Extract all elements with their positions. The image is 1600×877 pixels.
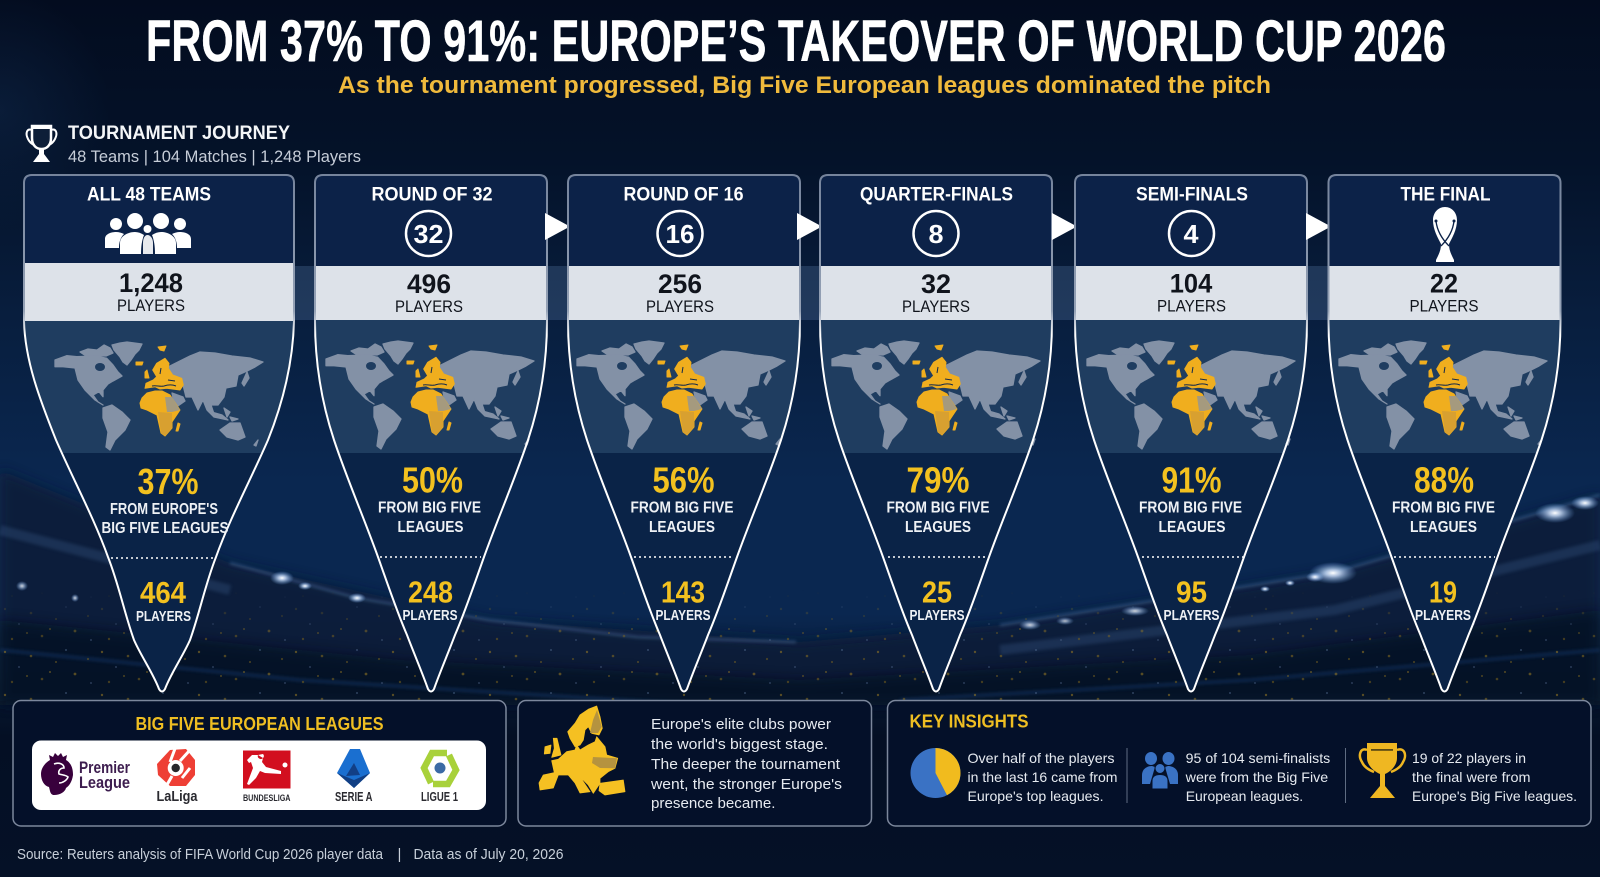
icon: europe map xyxy=(539,706,625,795)
stage heading: ROUND OF 32 xyxy=(372,184,492,206)
stage heading: SEMI-FINALS xyxy=(1136,184,1248,206)
big five players: 19 xyxy=(1429,574,1457,610)
panel: the final: PLAYERS xyxy=(1410,298,1478,316)
source footer: Data as of July 20, 2026 xyxy=(414,846,564,863)
big five share: 91% xyxy=(1162,460,1222,500)
stage heading: THE FINAL xyxy=(1400,184,1491,206)
icon: world cup trophy xyxy=(1433,207,1457,262)
stage heading: ALL 48 TEAMS xyxy=(87,184,211,206)
big five players: 248 xyxy=(408,574,453,610)
panel: semi-finals: PLAYERS xyxy=(1164,608,1220,624)
panel: all 48 teams: PLAYERS xyxy=(136,609,191,625)
insight: pie chart: Europe's top leagues. xyxy=(968,788,1104,804)
panel: round of 32 xyxy=(311,170,551,698)
insight: final trophy: Europe's Big Five leagues. xyxy=(1412,788,1577,804)
panel: quarter-finals: PLAYERS xyxy=(902,298,970,316)
big five share: 56% xyxy=(652,460,714,500)
insight: semi-finalists: 95 of 104 semi-finalists xyxy=(1186,750,1330,766)
logo: serie a: SERIE A xyxy=(335,790,372,804)
arrow xyxy=(797,213,822,240)
panel: quarter-finals: LEAGUES xyxy=(905,519,971,536)
callout text: Europe's elite clubs power xyxy=(651,716,831,733)
panel: round of 16: PLAYERS xyxy=(656,608,711,624)
big five players: 143 xyxy=(661,574,705,610)
player count: 22 xyxy=(1430,269,1458,299)
insight: pie chart: in the last 16 came from xyxy=(968,769,1118,785)
insight: semi-finalists xyxy=(1142,750,1330,804)
panel: quarter-finals: PLAYERS xyxy=(910,608,965,624)
panel: semi-finals xyxy=(1071,170,1311,698)
arrow xyxy=(545,213,570,240)
icon: trophy xyxy=(27,126,56,162)
panel: big five european leagues xyxy=(13,700,506,826)
icon: circled 32: 32 xyxy=(414,219,444,249)
player count: 496 xyxy=(407,269,451,299)
icon: circled 8 xyxy=(914,211,958,256)
panel: all 48 teams xyxy=(19,170,299,698)
big five players: 25 xyxy=(922,574,952,610)
panel: the final: LEAGUES xyxy=(1410,519,1477,536)
insight: pie chart xyxy=(910,748,1118,804)
source footer: Source: Reuters analysis of FIFA World Cup 2026 player data xyxy=(17,846,384,863)
player count: 1,248 xyxy=(119,268,183,298)
panel: semi-finals: PLAYERS xyxy=(1157,298,1226,316)
logo: premier league: League xyxy=(79,773,130,792)
panel: round of 32: PLAYERS xyxy=(402,608,458,624)
big five share: 79% xyxy=(906,460,970,500)
icon: group of people xyxy=(105,213,191,254)
panel: round of 16: LEAGUES xyxy=(649,519,715,536)
logo: premier league: Premier xyxy=(79,758,130,777)
panel: all 48 teams: FROM EUROPE'S xyxy=(110,501,218,518)
big five share: 50% xyxy=(402,460,463,500)
panel: all 48 teams: BIG FIVE LEAGUES xyxy=(102,520,228,537)
logo: serie a xyxy=(335,749,372,804)
panel: semi-finals: FROM BIG FIVE xyxy=(1139,500,1242,516)
logo strip xyxy=(32,740,486,810)
player count: 104 xyxy=(1170,269,1212,299)
logo: laliga xyxy=(156,746,198,805)
icon: circled 32 xyxy=(406,211,451,256)
logo: ligue 1 xyxy=(421,753,458,804)
insight: final trophy: the final were from xyxy=(1412,769,1530,785)
heading: KEY INSIGHTS xyxy=(910,712,1028,732)
panel: europe callout xyxy=(518,700,872,826)
panel: round of 16: PLAYERS xyxy=(646,298,714,316)
panel: quarter-finals: FROM BIG FIVE xyxy=(886,500,990,516)
panel: round of 16: FROM BIG FIVE xyxy=(630,500,734,516)
callout text: went, the stronger Europe's xyxy=(650,776,842,793)
journey stats: 48 Teams | 104 Matches | 1,248 Players xyxy=(68,148,361,166)
icon: circled 4 xyxy=(1169,211,1214,256)
panel: key insights xyxy=(888,700,1591,826)
insight: final trophy: 19 of 22 players in xyxy=(1412,750,1526,766)
panel: the final: PLAYERS xyxy=(1415,608,1471,624)
tournament journey header xyxy=(27,123,361,166)
arrow xyxy=(1306,213,1331,240)
icon: circled 4: 4 xyxy=(1184,219,1199,249)
logo: bundesliga: BUNDESLIGA xyxy=(243,793,291,803)
big five players: 464 xyxy=(140,575,187,610)
big five share: 37% xyxy=(138,461,198,502)
icon: circled 16: 16 xyxy=(666,219,694,249)
heading: BIG FIVE EUROPEAN LEAGUES xyxy=(136,714,384,734)
callout text: presence became. xyxy=(651,795,776,812)
logo: bundesliga xyxy=(243,750,291,803)
big five share: 88% xyxy=(1414,460,1474,500)
heading: tournament journey: TOURNAMENT JOURNEY xyxy=(68,123,290,144)
callout text: The deeper the tournament xyxy=(651,756,841,773)
logo: laliga: LaLiga xyxy=(156,788,198,805)
icon: circled 8: 8 xyxy=(928,219,944,249)
stage heading: ROUND OF 16 xyxy=(624,184,744,206)
insight: semi-finalists: European leagues. xyxy=(1186,788,1303,804)
insight: final trophy xyxy=(1360,743,1577,804)
insight: pie chart: Over half of the players xyxy=(968,750,1114,766)
subtitle: As the tournament progressed, Big Five European leagues dominated the pitch xyxy=(338,72,1271,99)
arrow xyxy=(1052,213,1077,240)
panel: semi-finals: LEAGUES xyxy=(1158,519,1226,536)
panel: all 48 teams: PLAYERS xyxy=(117,297,185,315)
player count: 256 xyxy=(658,269,702,299)
panel: the final xyxy=(1324,170,1564,698)
player count: 32 xyxy=(921,269,951,299)
stage heading: QUARTER-FINALS xyxy=(860,184,1013,206)
callout text xyxy=(650,716,842,812)
logo: ligue 1: LIGUE 1 xyxy=(421,790,458,804)
big five players: 95 xyxy=(1176,574,1207,610)
panel: round of 32: LEAGUES xyxy=(398,519,464,536)
insight: semi-finalists: were from the Big Five xyxy=(1185,769,1328,785)
panel: quarter-finals xyxy=(816,170,1056,698)
icon: circled 16 xyxy=(658,211,702,256)
panel: round of 32: FROM BIG FIVE xyxy=(378,500,481,516)
callout text: the world's biggest stage. xyxy=(651,736,828,753)
logo: premier league xyxy=(41,753,130,795)
panel: the final: FROM BIG FIVE xyxy=(1392,500,1495,516)
panel: round of 32: PLAYERS xyxy=(395,298,463,316)
panel: round of 16 xyxy=(564,170,804,698)
background: night stadium xyxy=(0,63,1600,705)
source footer: | xyxy=(398,846,401,863)
